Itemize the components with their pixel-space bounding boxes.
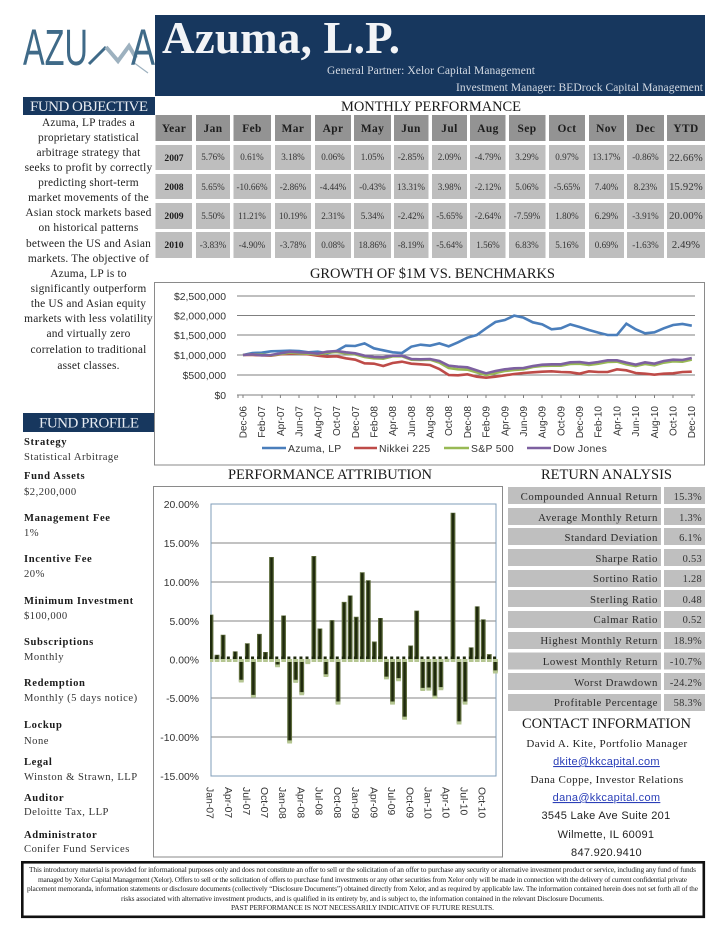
line: Azuma, LP [243, 316, 692, 355]
table row 2008: 5.06% [515, 182, 539, 192]
panel: return analysis table: 1.3% [679, 513, 702, 524]
table header row: Nov [596, 123, 617, 135]
panel: contact information: Dana Coppe, Investor Relations [530, 774, 684, 786]
x axis labels: Jan-09 [349, 787, 360, 819]
table header row: Jun [401, 123, 421, 135]
x axis labels: Oct-08 [331, 787, 342, 818]
x axis labels: Aug-10 [650, 406, 661, 438]
lockup: None [24, 736, 49, 747]
table row 2007: 1.05% [361, 152, 385, 162]
table row 2009: 6.29% [595, 211, 619, 221]
text block: fund objective: between the US and Asian [26, 238, 151, 250]
table row 2009: 2.31% [321, 211, 345, 221]
legend: Nikkei 225 [379, 444, 431, 455]
x axis labels: Apr-09 [500, 406, 512, 436]
x axis labels: Jan-08 [276, 787, 287, 819]
heading: return analysis: RETURN ANALYSIS [541, 467, 672, 483]
x axis labels: Oct-09 [556, 406, 568, 436]
text block: fund objective: proprietary statistical [38, 132, 139, 144]
panel: return analysis table: Calmar Ratio [594, 614, 658, 626]
table row 2008: -5.65% [554, 182, 581, 192]
x axis labels: Apr-10 [612, 406, 624, 436]
table row 2010 [164, 240, 700, 251]
x axis labels: Dec-09 [575, 406, 586, 438]
y axis labels: 5.00% [170, 617, 199, 628]
legal [24, 757, 138, 783]
text block: fund objective: Azuma, LP is to [50, 268, 127, 280]
incentive fee: Incentive Fee [24, 554, 92, 565]
table row 2008: -0.43% [359, 182, 386, 192]
x axis labels: Jun-10 [631, 406, 642, 437]
fund assets [24, 471, 85, 498]
text block: fund objective: and virtually zero [47, 328, 131, 340]
table row 2010: 5.16% [555, 240, 579, 250]
x axis labels: Oct-10 [476, 787, 486, 818]
x axis labels: Oct-08 [444, 406, 455, 436]
panel: return analysis table [508, 487, 705, 711]
x axis labels: Oct-10 [668, 406, 680, 436]
incentive fee: 20% [24, 569, 45, 580]
x axis labels: Jun-09 [519, 406, 530, 437]
text block: fund objective: on historical patterns [39, 222, 139, 234]
table row 2009: -2.42% [398, 211, 425, 221]
text block: fund objective: markets with less volatility [24, 313, 153, 325]
x axis labels: Apr-07 [276, 406, 287, 436]
legend: Azuma, LP [288, 444, 342, 455]
x axis labels: Jan-07 [204, 787, 214, 819]
management fee: Management Fee [24, 513, 111, 524]
panel: disclaimer [22, 862, 704, 917]
table row 2009: -3.91% [632, 211, 659, 221]
text block: fund objective: significantly outperform [31, 283, 146, 295]
x axis labels: Jul-09 [385, 787, 396, 816]
y axis labels [160, 500, 199, 783]
y axis labels: 20.00% [164, 500, 199, 511]
x axis labels: Jan-10 [422, 787, 432, 819]
management fee: 1% [24, 528, 39, 539]
redemption: Monthly (5 days notice) [24, 693, 138, 704]
auditor [24, 793, 109, 818]
x axis labels: Feb-10 [594, 406, 604, 438]
table row 2008: -4.44% [320, 182, 347, 192]
table row 2007: 5.76% [201, 152, 225, 162]
x axis labels: Apr-08 [294, 787, 306, 818]
panel: return analysis table: 0.53 [683, 554, 702, 565]
table row 2007: -2.85% [398, 152, 425, 162]
panel: return analysis table: 0.52 [683, 615, 702, 626]
x axis labels: Feb-07 [257, 406, 268, 438]
y axis labels: $0 [214, 391, 226, 402]
minimum investment: Minimum Investment [24, 596, 134, 607]
panel: return analysis table: Sterling Ratio [590, 594, 658, 606]
panel: return analysis table: Highest Monthly Return [540, 635, 658, 647]
x axis labels: Oct-07 [332, 406, 343, 436]
table row 2009: 1.80% [555, 211, 579, 221]
investment manager: Investment Manager: BEDrock Capital Management [456, 82, 704, 94]
title: Azuma, L.P. [162, 13, 400, 63]
x axis labels: Oct-09 [404, 787, 414, 818]
panel: contact information: dana@kkcapital.com [553, 792, 660, 804]
table row 2008: 13.31% [397, 182, 425, 192]
table row 2007: 13.17% [592, 152, 621, 162]
text block: fund objective: markets. The objective of [28, 253, 149, 265]
line: S&P 500 [243, 352, 692, 375]
table row 2008: -2.12% [475, 182, 502, 192]
x axis labels: Dec-06 [238, 406, 250, 438]
table row 2010: 0.08% [321, 240, 345, 250]
y axis labels: $1,000,000 [174, 351, 226, 362]
table row 2008: 7.40% [595, 182, 619, 192]
table header row: Sep [518, 123, 536, 135]
x axis labels: Aug-08 [426, 406, 436, 438]
redemption [24, 678, 138, 704]
table row 2007: 0.06% [321, 152, 345, 162]
table row 2010: 6.83% [515, 240, 539, 250]
x axis labels: Aug-07 [314, 406, 324, 438]
lockup: Lockup [24, 720, 62, 731]
x axis labels: Dec-07 [351, 406, 362, 438]
incentive fee [24, 554, 92, 580]
text block: fund objective: correlation to traditional [31, 344, 146, 356]
y axis labels: -5.00% [166, 694, 199, 705]
text block: fund objective: seeks to profit by correctly [25, 162, 152, 174]
x axis labels: Apr-09 [368, 787, 378, 818]
line chart: growth of $1M vs benchmarks [154, 282, 704, 465]
table row 2007: -0.86% [632, 152, 659, 162]
table row 2010: 18.86% [358, 240, 387, 250]
table row 2010: 2.49% [672, 240, 700, 251]
table row 2010: -8.19% [398, 240, 425, 250]
text block: fund objective: asset classes. [57, 360, 120, 372]
y axis labels: -10.00% [160, 733, 199, 744]
table row 2008 [164, 182, 703, 193]
table row 2010: 2010 [164, 240, 184, 251]
logo: Azuma: A [131, 19, 155, 76]
table row 2009: 5.50% [201, 211, 225, 221]
table header row: Feb [242, 123, 262, 135]
table row 2007 [164, 152, 703, 164]
table header row: Mar [282, 123, 304, 135]
auditor: Deloitte Tax, LLP [24, 807, 109, 818]
administrator: Conifer Fund Services [24, 844, 130, 855]
table: monthly performance [156, 115, 705, 258]
table row 2008: 3.98% [438, 182, 462, 192]
x axis labels: Jul-10 [458, 787, 468, 816]
y axis labels: 15.00% [164, 539, 199, 550]
text block: fund objective: Asian stock markets based [25, 207, 152, 219]
table row 2009: 11.21% [238, 211, 266, 221]
y axis labels: $500,000 [183, 371, 226, 382]
table row 2010: -4.90% [239, 240, 266, 250]
table row 2007: 2.09% [438, 152, 462, 162]
panel: contact information [526, 738, 688, 859]
table header row: Apr [323, 123, 343, 135]
table row 2008: 8.23% [634, 182, 658, 192]
monthly return bars [209, 513, 498, 744]
panel: return analysis table: Average Monthly Return [538, 512, 658, 524]
panel: return analysis table: Standard Deviation [564, 532, 658, 544]
heading: performance attribution: PERFORMANCE ATTRIBUTION [228, 467, 433, 483]
redemption: Redemption [24, 678, 86, 689]
panel: disclaimer: placement memoranda, information statements or disclosure documents (collectively “Disclosure Documents”) obtained directly from Xelor, and as required by applicable law. The information contained herein does not set forth all of the [27, 884, 699, 893]
table row 2010: 1.56% [476, 240, 500, 250]
table header row: Oct [558, 123, 576, 135]
header banner [155, 13, 705, 96]
panel: disclaimer: PAST PERFORMANCE IS NOT NECESSARILY INDICATIVE OF FUTURE RESULTS. [231, 903, 494, 912]
heading: growth of $1M: GROWTH OF $1M VS. BENCHMARKS [310, 266, 555, 282]
panel: fund profile heading: FUND PROFILE [39, 416, 139, 432]
general partner: General Partner: Xelor Capital Management [327, 65, 536, 77]
table row 2009: 5.34% [361, 211, 385, 221]
panel: return analysis table: Sortino Ratio [593, 573, 658, 585]
bar chart: performance attribution [154, 486, 502, 857]
panel: fund profile heading [23, 413, 154, 432]
y axis labels: 10.00% [164, 578, 199, 589]
table header row [162, 123, 699, 135]
strategy [24, 437, 119, 463]
panel: return analysis table: Worst Drawdown [574, 677, 658, 689]
x axis labels: Jul-08 [312, 787, 324, 816]
auditor: Auditor [24, 793, 64, 804]
y axis labels: $2,500,000 [174, 292, 226, 303]
panel: disclaimer: managed by Xelor Capital Management (Xelor). Offers to sell or the solicitation of offers to purchase fund investments or any other securities from Xelor only will be made in connection with the delivery of current confidential private [38, 875, 688, 884]
subscriptions: Subscriptions [24, 637, 94, 648]
table row 2010: 0.69% [595, 240, 619, 250]
x axis labels: Jun-08 [407, 406, 418, 437]
table header row: Year [162, 123, 186, 135]
text block: fund objective: the US and Asian equity [31, 298, 146, 310]
heading: contact information: CONTACT INFORMATION [522, 716, 692, 732]
panel: return analysis table: -10.7% [670, 657, 702, 668]
strategy: Strategy [24, 437, 67, 448]
panel: return analysis table: Lowest Monthly Return [543, 656, 658, 668]
table row 2010: -1.63% [632, 240, 659, 250]
text block: fund objective: predicting short-term [38, 177, 139, 189]
panel: contact information: Wilmette, IL 60091 [558, 829, 654, 841]
y axis labels: -15.00% [160, 772, 199, 783]
panel: return analysis table: 18.9% [674, 636, 702, 647]
heading: monthly performance: MONTHLY PERFORMANCE [341, 99, 521, 115]
table header row: YTD [673, 123, 699, 135]
table header row: Jul [441, 123, 458, 135]
panel: contact information: dkite@kkcapital.com [553, 756, 660, 768]
y axis labels: $1,500,000 [174, 331, 226, 342]
table header row: Aug [477, 123, 499, 135]
subscriptions [24, 637, 94, 663]
table header row: Jan [204, 123, 223, 135]
panel: fund profile details [24, 437, 138, 855]
minimum investment: $100,000 [24, 611, 68, 622]
panel: return analysis table: Compounded Annual Return [521, 491, 658, 503]
table row 2009 [164, 211, 703, 222]
legend: Dow Jones [553, 444, 607, 455]
text block: fund objective: arbitrage strategy that [37, 147, 141, 159]
x axis labels: Aug-09 [538, 406, 548, 438]
x axis labels: Dec-08 [463, 406, 474, 438]
x axis labels [204, 787, 486, 819]
x axis labels: Apr-10 [440, 787, 450, 818]
table row 2007: 3.18% [281, 152, 305, 162]
logo: Azuma: AZU [23, 19, 88, 76]
text block: fund objective: market movements of the [28, 192, 149, 204]
x axis labels: Feb-09 [482, 406, 492, 438]
x axis labels: Apr-07 [222, 787, 233, 818]
table header row: May [361, 123, 384, 135]
panel: disclaimer: risks associated with alternative investment products, and is qualified in its entirety by, and is subject to, the information contained in the relevant Disclosure Documents. [121, 894, 604, 903]
x axis labels: Dec-10 [687, 406, 698, 438]
fund assets: Fund Assets [24, 471, 85, 482]
panel: contact information: David A. Kite, Portfolio Manager [526, 738, 688, 750]
line: Dow Jones [243, 351, 692, 373]
table row 2009: -7.59% [514, 211, 541, 221]
table row 2007: 3.29% [515, 152, 539, 162]
line: Nikkei 225 [243, 354, 692, 378]
panel: return analysis table: -24.2% [670, 678, 702, 689]
y axis labels: $2,000,000 [174, 312, 226, 322]
administrator [24, 830, 130, 855]
x axis labels: Jun-07 [294, 406, 306, 437]
panel: return analysis table: Sharpe Ratio [595, 553, 658, 565]
legal: Winston & Strawn, LLP [24, 772, 138, 783]
table row 2009: 2009 [164, 211, 184, 222]
panel: contact information: 847.920.9410 [571, 847, 642, 859]
y axis labels [174, 292, 226, 402]
text block: fund objective: Azuma, LP trades a [42, 117, 135, 129]
table row 2010: -3.78% [280, 240, 307, 250]
x axis labels: Apr-08 [388, 406, 399, 436]
table row 2008: 15.92% [669, 182, 703, 193]
table row 2007: -4.79% [475, 152, 502, 162]
table row 2009: -5.65% [436, 211, 463, 221]
y axis labels: 0.00% [170, 656, 199, 666]
administrator: Administrator [24, 830, 97, 841]
x axis labels: Oct-07 [258, 787, 269, 818]
table row 2007: 22.66% [669, 153, 703, 164]
panel: return analysis table: Profitable Percentage [554, 697, 658, 709]
panel: fund objective heading: FUND OBJECTIVE [30, 99, 148, 115]
panel: return analysis table: 6.1% [679, 533, 702, 544]
lockup [24, 720, 62, 747]
x axis labels: Feb-08 [370, 406, 380, 438]
table row 2007: 0.97% [555, 152, 579, 162]
table row 2010: -3.83% [200, 240, 227, 250]
legend: S&P 500 [471, 444, 514, 455]
x axis labels [238, 406, 698, 438]
table row 2008: 5.65% [201, 182, 225, 192]
table row 2008: -2.86% [280, 182, 307, 192]
table row 2009: 10.19% [279, 211, 307, 221]
panel: contact information: 3545 Lake Ave Suite 201 [541, 810, 671, 822]
panel: return analysis table: 15.3% [674, 492, 702, 503]
legend [262, 444, 607, 455]
legal: Legal [24, 757, 52, 768]
table row 2007: 2007 [164, 153, 184, 164]
strategy: Statistical Arbitrage [24, 452, 119, 463]
panel: disclaimer: This introductory material is provided for informational purposes only and does not constitute an offer to sell or the solicitation of an offer to purchase any security or alternative investment product or service, including any fund of funds [29, 865, 696, 874]
x axis labels: Jul-07 [240, 787, 251, 816]
table row 2008: 2008 [164, 182, 184, 193]
table row 2009: -2.64% [475, 211, 502, 221]
minimum investment [24, 596, 134, 622]
subscriptions: Monthly [24, 652, 64, 663]
table row 2008: -10.66% [236, 182, 268, 192]
text block: fund objective [24, 117, 153, 372]
table header row: Dec [636, 123, 655, 135]
table row 2009: 20.00% [669, 211, 703, 222]
table row 2007: 0.61% [240, 152, 264, 162]
table row 2010: -5.64% [436, 240, 463, 250]
panel: return analysis table: 0.48 [683, 595, 702, 606]
panel: return analysis table: 1.28 [683, 574, 702, 585]
fund assets: $2,200,000 [24, 487, 77, 498]
panel: return analysis table: 58.3% [674, 698, 702, 709]
management fee [24, 513, 111, 539]
